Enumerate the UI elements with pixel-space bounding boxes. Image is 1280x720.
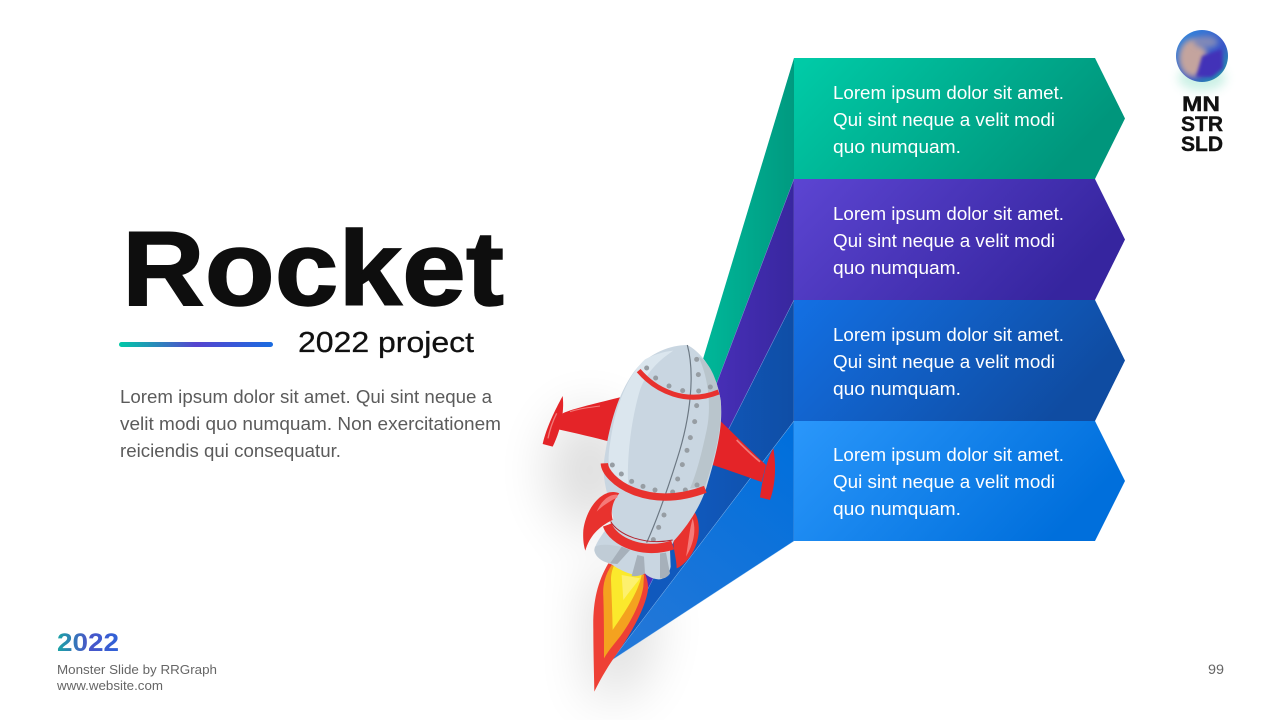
logo: STR [1181,113,1223,136]
footer credits [56,662,217,693]
panel: purple arrow: quo numquam. [833,257,961,278]
seam [647,345,691,543]
footer year: 2022 [57,629,119,657]
logo: MN [1182,93,1220,116]
panel: green arrow: quo numquam. [833,136,961,157]
panel: dark blue arrow: Qui sint neque a velit modi [833,351,1055,372]
title: Rocket [122,210,504,328]
rocket drop shadow [548,410,660,700]
logo: SLD [1181,133,1223,156]
logo [1176,30,1228,156]
description text [120,386,501,461]
right wing [713,421,766,482]
footer credits: www.website.com [56,678,163,693]
panel: dark blue arrow: Lorem ipsum dolor sit amet. [833,324,1064,345]
panel: light blue arrow: Qui sint neque a velit modi [833,471,1055,492]
panel: purple arrow: Lorem ipsum dolor sit amet. [833,203,1064,224]
right side fin [673,510,699,568]
panel: green arrow [794,58,1125,179]
panel: green arrow: Qui sint neque a velit modi [833,109,1055,130]
panel: dark blue arrow [794,300,1125,421]
footer credits: Monster Slide by RRGraph [57,662,217,677]
body shade [690,357,721,488]
description text: reiciendis qui consequatur. [120,440,341,461]
panel: light blue arrow: Lorem ipsum dolor sit amet. [833,444,1064,465]
page number: 99 [1208,661,1224,677]
title underline [119,342,273,347]
3D perspective side faces [612,58,794,660]
bands [639,371,719,397]
nozzle shading [594,545,622,563]
panel: light blue arrow [794,421,1125,541]
panel: green arrow: Lorem ipsum dolor sit amet. [833,82,1064,103]
panel: purple arrow [794,179,1125,300]
icon: rocket [543,345,775,692]
flame [593,563,648,692]
body highlight [609,351,673,487]
description text: Lorem ipsum dolor sit amet. Qui sint neque a [120,386,493,407]
panel: dark blue arrow: quo numquam. [833,378,961,399]
panel: light blue arrow: quo numquam. [833,498,961,519]
panel: purple arrow: Qui sint neque a velit modi [833,230,1055,251]
left side fin [583,492,619,551]
subtitle: 2022 project [298,327,474,359]
description text: velit modi quo numquam. Non exercitationem [120,413,501,434]
rivets [610,357,713,542]
body [594,345,721,579]
left wing [558,396,625,442]
